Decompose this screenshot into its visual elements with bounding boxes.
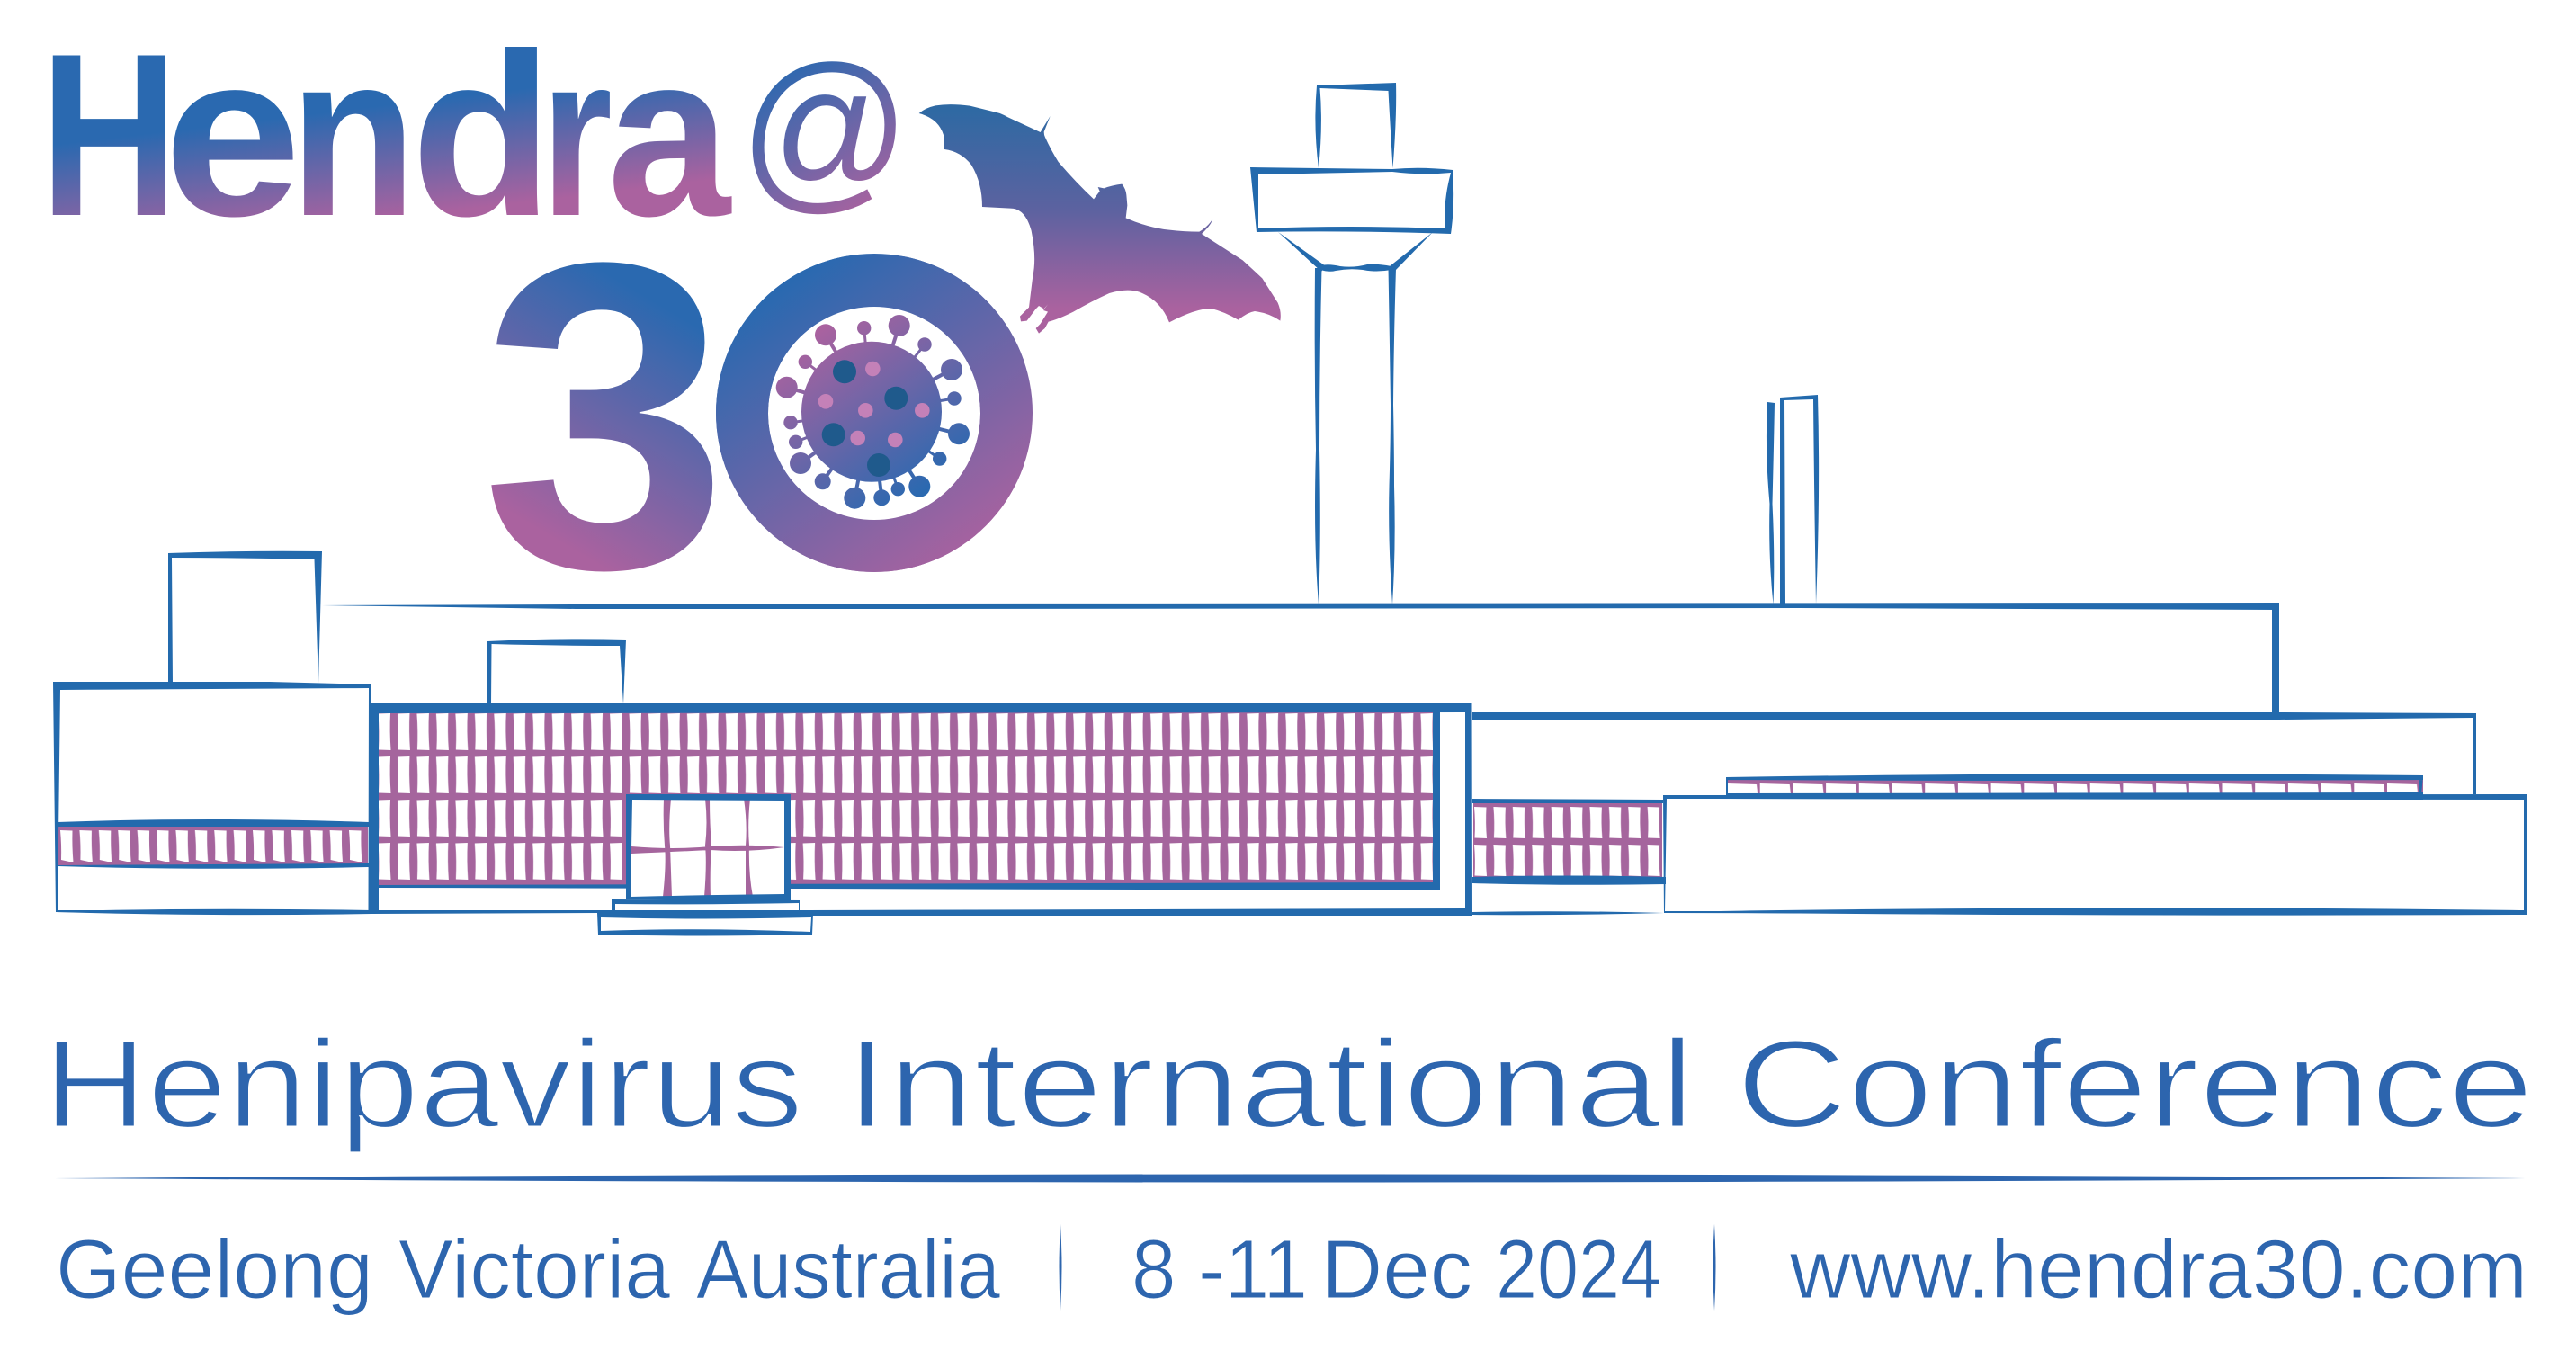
right upper window strip: [1727, 778, 2423, 795]
building: conference centre line drawing: [53, 83, 2527, 935]
icon: virus particle: [776, 315, 970, 509]
details: location, dates and website: [56, 1222, 2527, 1316]
middle window band: [1473, 802, 1662, 878]
chimney: [1767, 395, 1819, 604]
entrance mullions: [631, 799, 784, 897]
divider rule: [54, 1175, 2526, 1182]
left wing band lines: [56, 819, 371, 915]
control tower slants: [1278, 232, 1433, 272]
control tower wide cab: [1250, 167, 1453, 234]
right lower block base line: [1665, 908, 2527, 916]
digit 0 ring: [716, 254, 1033, 572]
dates: [1131, 1222, 1661, 1316]
control tower neck: [1320, 264, 1391, 272]
wordmark text: Hendra: n: [290, 4, 416, 264]
second tier roof: [1472, 712, 2476, 794]
digit 3: 3: [481, 172, 729, 659]
location: Victoria: [398, 1222, 670, 1316]
separator: [1713, 1224, 1716, 1311]
entrance frame: [626, 794, 791, 901]
entrance lower step: [597, 913, 813, 935]
location: [56, 1222, 1000, 1316]
main facade window grid: [379, 712, 1433, 886]
dark receptor dots: [822, 360, 908, 477]
wordmark text: Hendra: d: [411, 4, 553, 264]
separator: [1060, 1224, 1061, 1311]
title: Hendra@ wordmark: [40, 4, 910, 264]
control tower shaft: [1315, 268, 1396, 604]
inner facade frame: [379, 712, 1440, 890]
upper block right edge: [2272, 603, 2279, 720]
dates: 2024: [1496, 1222, 1661, 1316]
long upper roof: [322, 603, 2279, 610]
entrance pavilion: [597, 794, 813, 935]
wordmark text: Hendra: e: [164, 4, 301, 264]
at sign: @: [739, 30, 910, 228]
wordmark text: Hendra: a: [607, 4, 732, 264]
entrance window: [630, 797, 787, 898]
entrance upper step: [612, 899, 800, 915]
virus body: [801, 342, 942, 482]
dates: 8 -11: [1131, 1222, 1308, 1316]
wordmark text: Hendra: r: [541, 4, 613, 264]
heading: conference name: Conference: [1736, 1015, 2534, 1154]
wordmark text: Hendra: H: [40, 4, 178, 264]
website: www.hendra30.com: [1789, 1222, 2527, 1316]
left wing outline: [53, 682, 371, 914]
heading: conference name: [43, 1015, 2534, 1154]
central rooftop box: [487, 639, 626, 704]
control tower top box: [1315, 83, 1396, 168]
dates: Dec: [1321, 1222, 1472, 1316]
digit 0 ring: 0: [690, 162, 1056, 663]
title: large number 30: [491, 254, 1033, 572]
left rooftop tower: [168, 551, 322, 684]
location: Geelong: [56, 1222, 373, 1316]
right upper strip lines: [1726, 774, 2423, 800]
icon: flying bat silhouette: [919, 104, 1281, 334]
right lower block outline: [1663, 794, 2527, 915]
location: Australia: [696, 1222, 1000, 1316]
main block outline: [371, 703, 1472, 916]
light receptor dots: [818, 362, 930, 447]
virus spikes: [776, 315, 970, 509]
heading: conference name: International: [845, 1015, 1695, 1154]
left wing window band: [58, 826, 368, 866]
heading: conference name: Henipavirus: [43, 1015, 803, 1154]
middle band lines: [1472, 799, 1666, 915]
